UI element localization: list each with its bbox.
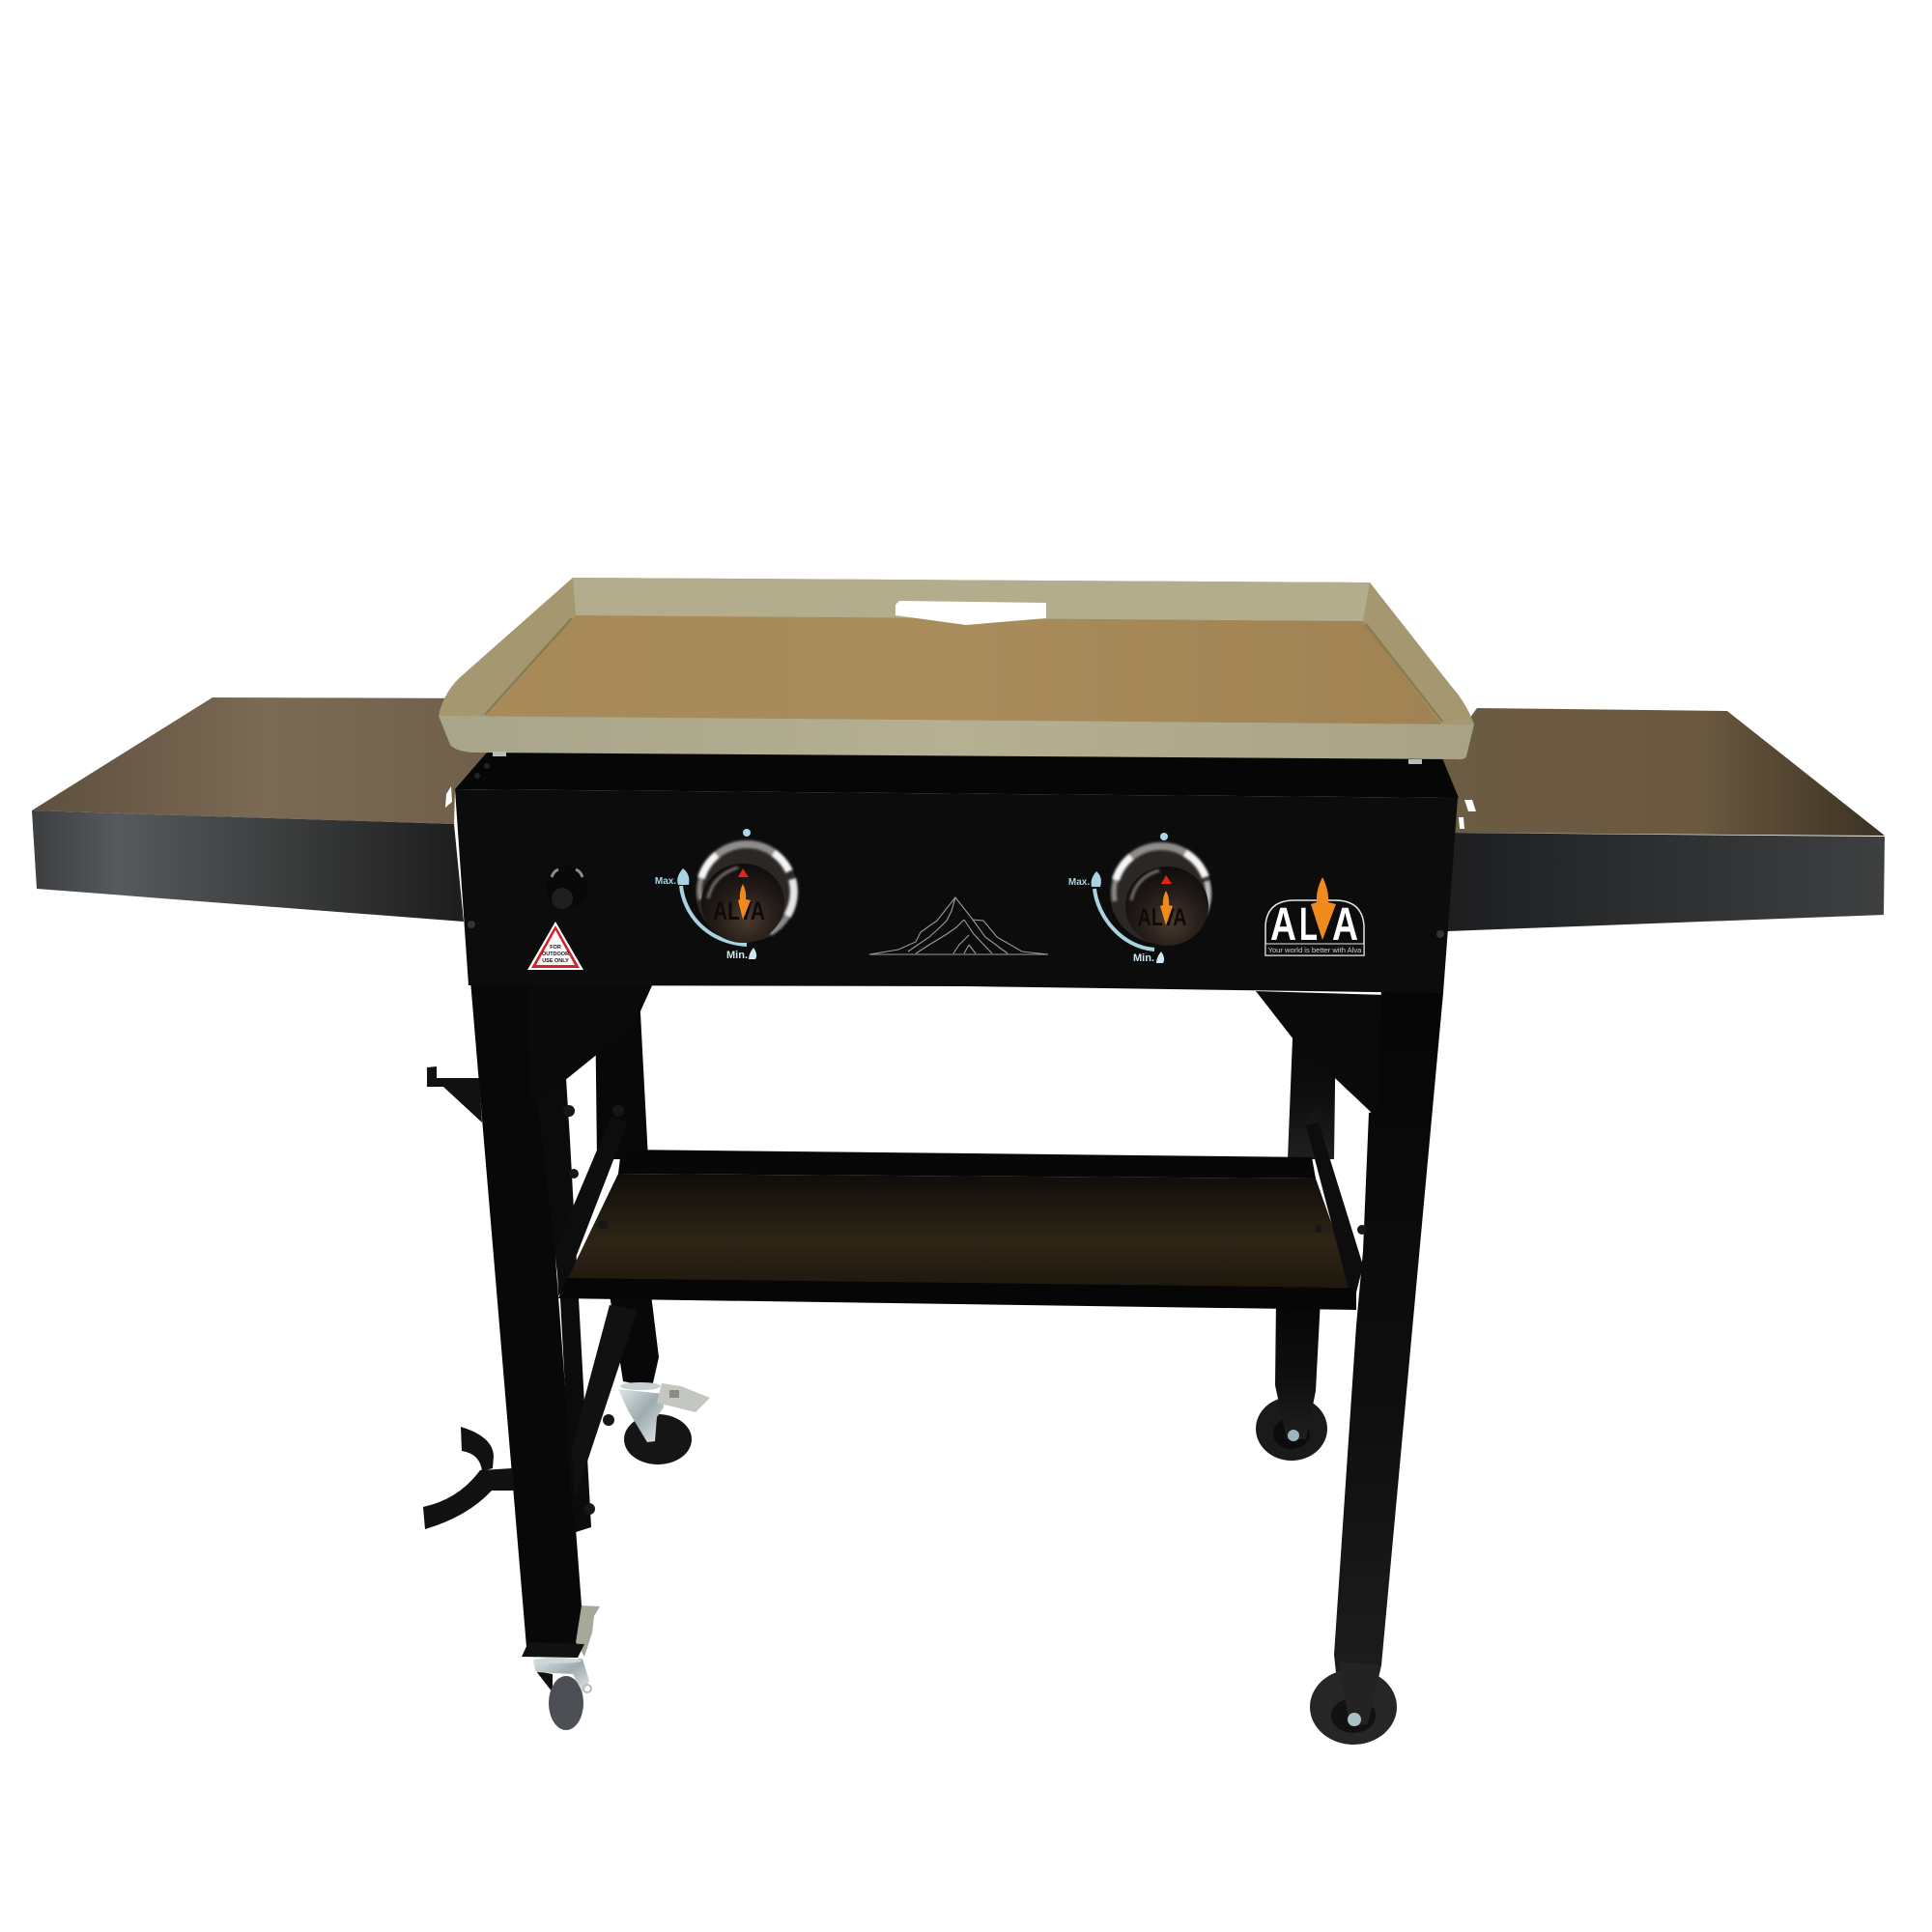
right knob chrome ring [1110, 843, 1212, 944]
right knob brand: ALVA [1138, 904, 1186, 931]
front right gusset [1256, 991, 1387, 1113]
warning triangle: OUTDOOR [542, 952, 569, 957]
griddle cooking surface [481, 615, 1445, 729]
logo letter L: L [1299, 899, 1318, 951]
front right leg [1334, 985, 1443, 1726]
lower left brace [572, 1305, 638, 1499]
left knob min flame [749, 948, 756, 959]
panel screws [468, 921, 1444, 938]
right burner knob [1068, 833, 1212, 964]
griddle base silhouette [439, 578, 1474, 744]
logo final letter A: A [1332, 899, 1358, 951]
griddle right wall [1363, 582, 1474, 726]
control panel [455, 789, 1458, 993]
firebox under griddle [445, 746, 1476, 829]
logo letter A: A [1270, 899, 1296, 951]
shelf right bracket [1306, 1122, 1363, 1293]
rear left leg [595, 995, 659, 1387]
front right wheel [1310, 1662, 1397, 1745]
shelf back wall [618, 1150, 1316, 1179]
rear left caster [618, 1382, 710, 1464]
left knob brand: ALVA [713, 896, 765, 925]
right side shelf [1430, 708, 1885, 931]
front left gusset [526, 980, 653, 1097]
right knob orange flame [1160, 891, 1173, 925]
frame bolts [563, 1105, 1367, 1515]
logo tagline: Your world is better with Alva [1268, 946, 1362, 954]
rear right wheel [1256, 1397, 1327, 1461]
right knob min label: Min. [1133, 952, 1154, 964]
shelf floor [567, 1174, 1354, 1288]
rear right axle bolt [1288, 1430, 1299, 1441]
griddle front lip [439, 716, 1474, 759]
griddle handle cutout [895, 601, 1046, 625]
left knob min label: Min. [726, 950, 748, 961]
tool hook [427, 1066, 482, 1122]
right knob max flame [1092, 871, 1101, 887]
right knob red pointer [1161, 875, 1172, 884]
right knob indicator dot [1160, 833, 1168, 840]
right knob min flame [1156, 952, 1164, 963]
left knob indicator dot [743, 829, 751, 837]
propane tank ring [423, 1427, 515, 1529]
right knob max label: Max. [1068, 877, 1090, 888]
front left leg side face [536, 1078, 591, 1532]
left burner knob [655, 829, 798, 961]
right knob dome reflection [1131, 870, 1159, 900]
logo tagline box [1265, 944, 1364, 955]
shelf left bracket [556, 1116, 628, 1296]
brand logo [1265, 877, 1364, 955]
left knob dome [701, 864, 784, 943]
logo orange flame V [1311, 877, 1336, 940]
shelf front lip [558, 1278, 1356, 1310]
igniter button [546, 866, 588, 909]
left knob orange flame [738, 884, 751, 920]
front left leg [470, 980, 582, 1647]
mountain line art [869, 897, 1048, 954]
right knob dome [1125, 867, 1208, 946]
griddle plate [439, 578, 1474, 759]
left knob chrome ring [696, 841, 798, 942]
right knob flame scale [1094, 889, 1154, 950]
left knob max flame [677, 868, 689, 885]
left knob flame scale [681, 886, 747, 945]
front left caster [522, 1605, 600, 1730]
warning triangle: FOR [550, 945, 561, 951]
griddle inner channel lines [485, 618, 1442, 722]
left side shelf [32, 697, 502, 922]
lower shelf [556, 1116, 1363, 1310]
logo arch outline [1265, 900, 1364, 955]
rear right leg [1275, 1014, 1336, 1439]
griddle support posts [493, 752, 1422, 764]
griddle back wall [573, 578, 1370, 621]
left knob max label: Max. [655, 876, 676, 887]
left knob red pointer [738, 868, 749, 877]
warning triangle [527, 922, 583, 970]
griddle left wall [439, 578, 576, 720]
left knob dome reflection [708, 867, 738, 898]
warning triangle: USE ONLY [542, 958, 569, 964]
